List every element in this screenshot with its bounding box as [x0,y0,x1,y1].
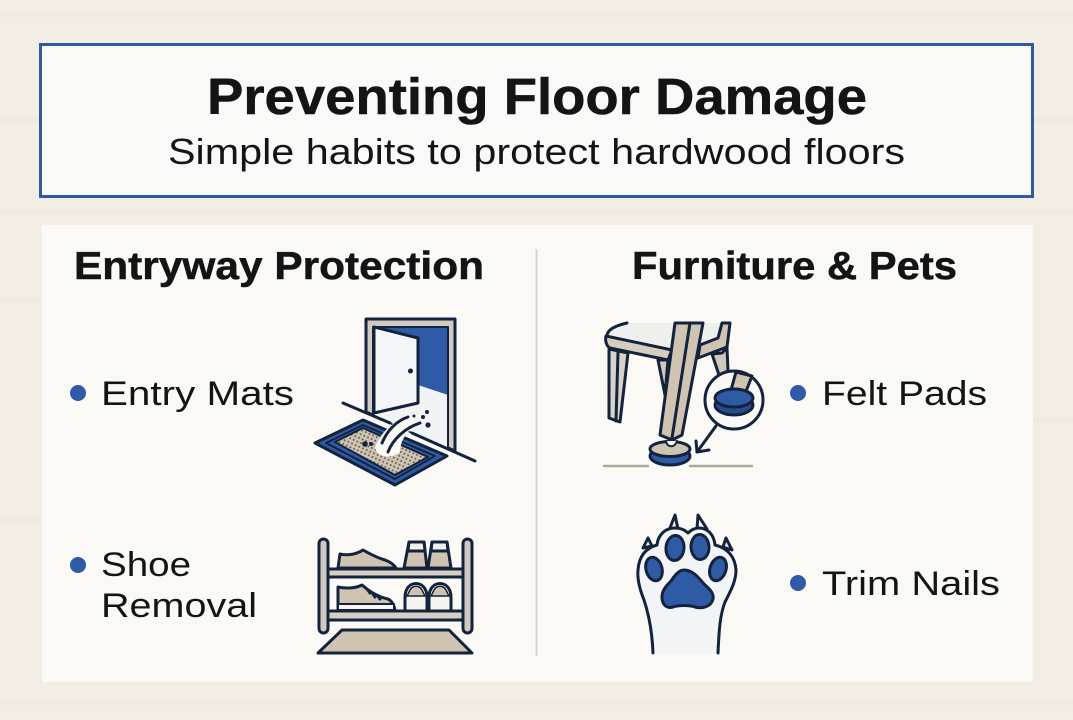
icon: chair leg with felt pad [604,323,763,466]
panel: tips [42,225,1033,682]
subtitle: Simple habits to protect hardwood floors [168,131,905,172]
item: shoe removal: Shoe [101,546,191,584]
icon: shoe rack [318,539,472,653]
heading: entryway protection: Entryway Protection [74,245,484,288]
item: trim nails: Trim Nails [822,565,1000,603]
icon: door and entry mat [315,319,475,485]
item: shoe removal: Removal [101,587,257,625]
item: shoe removal [70,546,257,625]
title box [40,44,1032,196]
heading: furniture and pets: Furniture & Pets [632,245,957,288]
title: Preventing Floor Damage [207,68,867,125]
item: felt pads: Felt Pads [822,375,987,413]
icon: paw [638,515,736,653]
item: entry mats: Entry Mats [101,375,294,413]
